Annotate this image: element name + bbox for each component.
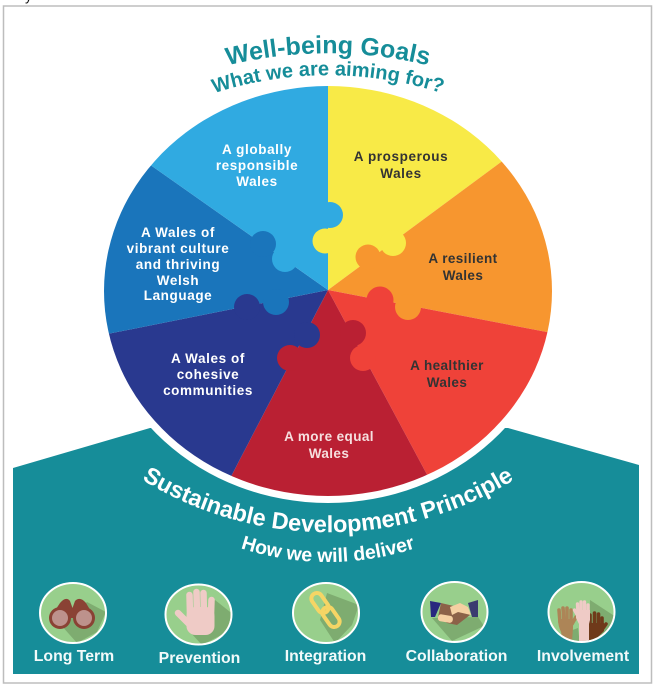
label: long term: Long Term: [34, 648, 114, 665]
label: a wales of vibrant culture: vibrant culture: [127, 241, 229, 256]
label: involvement: Involvement: [537, 648, 630, 665]
label: a globally responsible wales: A globally: [222, 142, 292, 157]
label: a wales of cohesive communities: communities: [163, 383, 253, 398]
label: prevention: Prevention: [159, 650, 240, 667]
label: a wales of vibrant culture: A Wales of: [141, 225, 215, 240]
label: a wales of vibrant culture: and thriving: [136, 257, 220, 272]
segment: a wales of cohesive communities: [108, 290, 328, 476]
icon: raised hands: [548, 582, 616, 645]
icon: raised hand: [166, 584, 234, 645]
icon: handshake: [422, 582, 488, 642]
label: a resilient wales: A resilient: [428, 251, 498, 266]
segment: a healthier wales: [328, 290, 548, 475]
segment: a resilient wales: [328, 162, 552, 332]
subheading: how we will deliver: How we will deliver: [242, 536, 413, 562]
segment: a wales of vibrant culture: [104, 166, 328, 334]
segment: a more equal wales: [231, 290, 428, 496]
label: integration: Integration: [285, 648, 366, 665]
label: a healthier wales: Wales: [427, 375, 467, 390]
label: collaboration: Collaboration: [406, 648, 507, 665]
label: a more equal wales: Wales: [309, 446, 349, 461]
label: a more equal wales: A more equal: [284, 429, 374, 444]
label: a prosperous wales: Wales: [380, 166, 422, 181]
label: a healthier wales: A healthier: [410, 358, 484, 373]
segment: a globally responsible wales: [151, 86, 328, 290]
label: a wales of cohesive communities: A Wales of: [171, 351, 245, 366]
segment: a prosperous wales: [328, 86, 502, 290]
puzzle wheel chart: [104, 86, 552, 496]
label: a prosperous wales: A prosperous: [354, 149, 448, 164]
subtitle: what we are aiming for: What we are aiming for?: [210, 61, 444, 92]
label: a globally responsible wales: Wales: [236, 174, 278, 189]
title: well-being goals: Well-being Goals: [224, 35, 430, 64]
label: a globally responsible wales: responsible: [216, 158, 298, 173]
puzzle tabs: [234, 202, 421, 371]
label: a wales of vibrant culture: Language: [144, 288, 212, 303]
label: a wales of cohesive communities: cohesive: [177, 367, 239, 382]
label: a wales of vibrant culture: Welsh: [157, 273, 199, 288]
icon: chain links: [293, 583, 359, 643]
heading: sustainable development principle: Sustainable Development Principle: [144, 468, 512, 536]
label: a resilient wales: Wales: [443, 268, 483, 283]
icon: binoculars: [40, 583, 106, 643]
